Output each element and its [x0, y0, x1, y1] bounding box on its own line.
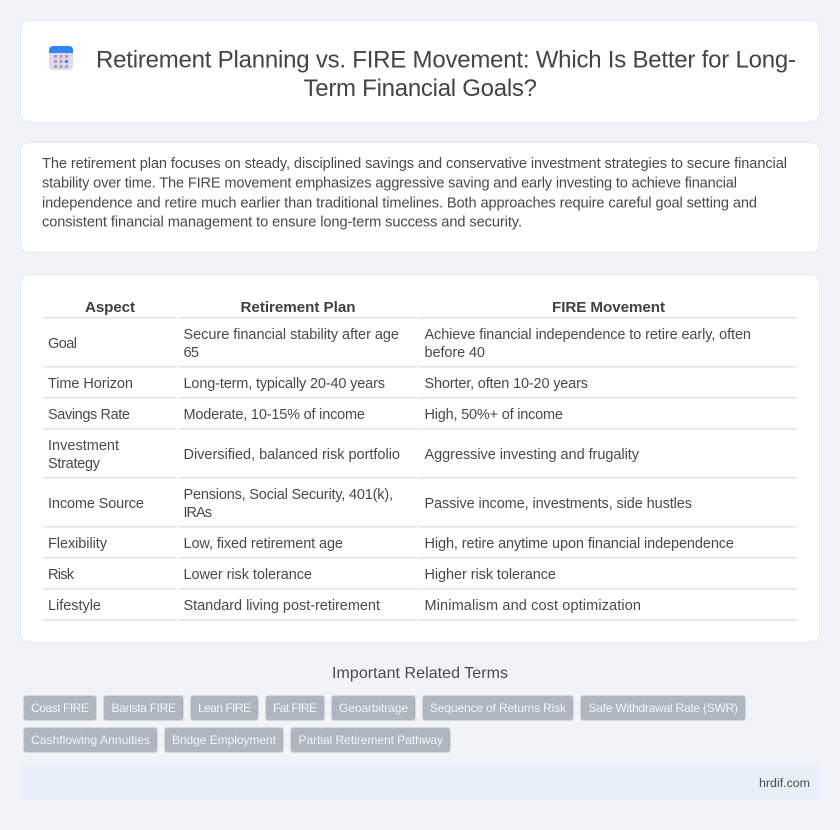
- title: Retirement Planning vs. FIRE Movement: Which Is Better for Long-: [96, 46, 796, 74]
- table header row: [85, 299, 665, 316]
- icon: calendar: [49, 46, 73, 70]
- row: time horizon: Shorter, often 10-20 years: [424, 376, 588, 392]
- row: investment strategy: Strategy: [48, 456, 101, 472]
- row: time horizon: Long-term, typically 20-40 years: [184, 376, 385, 392]
- row: risk: [48, 567, 556, 583]
- tags: related terms: Fat FIRE: [273, 701, 317, 715]
- tags: related terms: Safe Withdrawal Rate (SWR): [588, 701, 738, 715]
- tags: related terms: Partial Retirement Pathway: [298, 733, 443, 747]
- row: investment strategy: Investment: [48, 438, 119, 454]
- row: savings rate: Moderate, 10-15% of income: [184, 407, 365, 423]
- row: time horizon: [48, 376, 588, 392]
- text block: description: independence and retire much earlier than traditional timelines. Both approaches require careful goal setting and: [42, 196, 757, 212]
- row: flexibility: [48, 536, 734, 552]
- row: investment strategy: Diversified, balanced risk portfolio: [184, 447, 400, 463]
- tags: related terms: Bridge Employment: [172, 733, 277, 747]
- text block: description: consistent financial management to ensure long-term success and security.: [42, 214, 522, 230]
- row: risk: Risk: [48, 567, 75, 583]
- panel: header: [20, 20, 820, 122]
- table header row: Aspect: [85, 299, 135, 316]
- row: savings rate: [48, 407, 563, 423]
- table header row: FIRE Movement: [552, 299, 665, 316]
- row: investment strategy: [48, 438, 640, 472]
- text block: description: [42, 156, 787, 230]
- tags: related terms: Geoarbitrage: [339, 701, 408, 715]
- footer: hrdif.com: [759, 776, 810, 790]
- row: goal: Goal: [48, 336, 77, 352]
- tags: related terms: Coast FIRE: [31, 701, 89, 715]
- row: savings rate: Savings Rate: [48, 407, 130, 423]
- tags: related terms: Barista FIRE: [112, 701, 176, 715]
- row: income source: [48, 487, 692, 521]
- panel: description: [20, 142, 820, 252]
- table header row: Retirement Plan: [240, 299, 356, 316]
- row: flexibility: Low, fixed retirement age: [184, 536, 343, 552]
- text block: description: The retirement plan focuses on steady, disciplined savings and conservative investment strategies to secure financial: [42, 156, 787, 172]
- tags: related terms: Cashflowing Annuities: [31, 733, 150, 747]
- row: income source: Income Source: [48, 496, 144, 512]
- panel: comparison table: [20, 274, 820, 642]
- row: goal: 65: [184, 345, 199, 361]
- row: flexibility: High, retire anytime upon financial independence: [424, 536, 734, 552]
- row: savings rate: High, 50%+ of income: [424, 407, 563, 423]
- tags: related terms: Lean FIRE: [198, 701, 251, 715]
- row: income source: IRAs: [184, 505, 212, 521]
- row: goal: [48, 327, 751, 361]
- footer: [20, 766, 820, 800]
- text block: description: stability over time. The FIRE movement emphasizes aggressive saving and early investing to achieve financial: [42, 176, 737, 192]
- heading: important related terms: Important Related Terms: [332, 665, 508, 682]
- row: income source: Passive income, investments, side hustles: [424, 496, 692, 512]
- row: time horizon: Time Horizon: [48, 376, 133, 392]
- row: investment strategy: Aggressive investing and frugality: [424, 447, 640, 463]
- row: risk: Higher risk tolerance: [424, 567, 556, 583]
- row: lifestyle: Lifestyle: [48, 598, 101, 614]
- row: lifestyle: Standard living post-retirement: [184, 598, 380, 614]
- row: lifestyle: [48, 598, 641, 614]
- row: goal: before 40: [424, 345, 485, 361]
- title: [96, 46, 796, 102]
- row: goal: Achieve financial independence to retire early, often: [424, 327, 751, 343]
- tags: related terms: [24, 696, 746, 752]
- title: Term Financial Goals?: [304, 75, 537, 102]
- row: risk: Lower risk tolerance: [184, 567, 312, 583]
- row: goal: Secure financial stability after age: [184, 327, 399, 343]
- row: lifestyle: Minimalism and cost optimization: [424, 598, 641, 614]
- row: flexibility: Flexibility: [48, 536, 108, 552]
- row: income source: Pensions, Social Security, 401(k),: [184, 487, 393, 503]
- tags: related terms: Sequence of Returns Risk: [430, 701, 567, 715]
